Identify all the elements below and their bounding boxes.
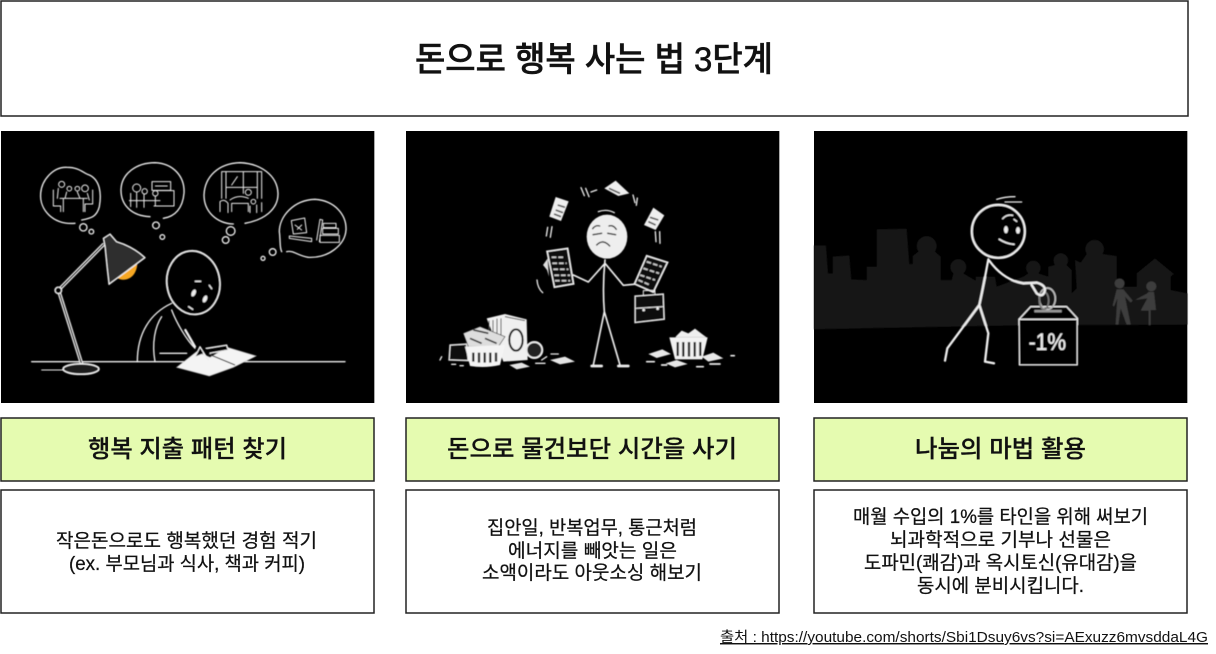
heading: step 3: 나눔의 마법 활용 (915, 436, 1086, 463)
panel: illustration 1, person writing at a desk (1, 131, 374, 403)
lamp (42, 234, 145, 374)
title (1, 1, 1188, 116)
heading: step 2: 돈으로 물건보단 시간을 사기 (447, 436, 737, 463)
text block: step 2: 에너지를 빼앗는 일은 (508, 540, 677, 562)
heading: step 1 (1, 418, 374, 481)
panel: illustration 3, person donating 1 percent (814, 131, 1187, 403)
panel: illustration 2, stressed person juggling papers (406, 131, 779, 403)
heading: step 2 (406, 418, 779, 481)
text block: step 3: 매월 수입의 1%를 타인을 위해 써보기 (853, 506, 1148, 528)
heading: step 1: 행복 지출 패턴 찾기 (88, 436, 287, 463)
text block: step 3 (814, 490, 1187, 613)
washing machine and laundry pile (440, 314, 575, 369)
thought bubble: living room (204, 163, 278, 243)
donation box: -1% (1029, 329, 1066, 356)
thought bubble: cafe with parents (121, 163, 184, 239)
heading: step 3 (814, 418, 1187, 481)
text block: step 3: 동시에 분비시킵니다. (917, 575, 1084, 597)
small family silhouettes (1113, 278, 1156, 325)
text block: step 3: 뇌과학적으로 기부나 선물은 (890, 529, 1111, 551)
donation box (1019, 307, 1077, 365)
person writing (137, 247, 228, 362)
text block: step 1: 작은돈으로도 행복했던 경험 적기 (56, 530, 317, 552)
thought bubble: family meal (41, 167, 100, 234)
text block: step 3: 도파민(쾌감)과 옥시토신(유대감)을 (864, 552, 1137, 574)
text block: step 1 (1, 490, 374, 613)
source link: 출처 : https://youtube.com/shorts/Sbi1Dsuy6vs?si=AExuzz6mvsddaL4G (720, 629, 1208, 646)
happy stick figure (945, 197, 1045, 363)
city and people silhouettes (814, 229, 1187, 329)
text block: step 2 (406, 490, 779, 613)
title: 돈으로 행복 사는 법 3단계 (415, 41, 773, 79)
juggled papers (537, 181, 664, 293)
thought bubble: books and laptop (261, 199, 346, 260)
text block: step 1: (ex. 부모님과 식사, 책과 커피) (69, 553, 305, 575)
worried stick figure (573, 210, 637, 366)
laundry basket and scattered papers (647, 329, 734, 367)
coin (1039, 288, 1055, 309)
desk line (32, 360, 345, 364)
text block: step 2: 소액이라도 아웃소싱 해보기 (482, 562, 702, 584)
clipboards and briefcase (543, 248, 668, 323)
text block: step 2: 집안일, 반복업무, 통근처럼 (487, 517, 697, 539)
open book (177, 347, 256, 376)
